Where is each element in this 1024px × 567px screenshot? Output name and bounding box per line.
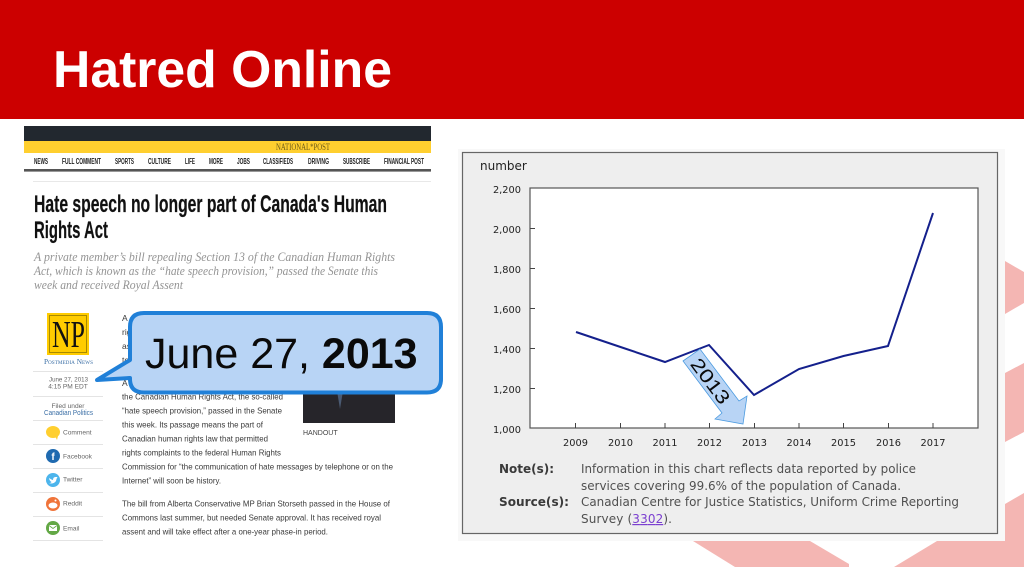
- article body text: to: [122, 355, 129, 365]
- x axis labels: 2016: [876, 438, 901, 449]
- x axis labels: 2013: [742, 438, 767, 449]
- x axis labels: 2014: [787, 438, 811, 449]
- x axis labels: 2010: [608, 438, 633, 449]
- article body text: rig: [122, 327, 132, 337]
- navigation bar: LIFE: [185, 157, 195, 166]
- y axis labels: 2,200: [493, 185, 521, 196]
- article body text: Commons last summer, but needed Senate approval. It has received royal: [122, 512, 381, 522]
- article sidebar: Filed under: [52, 403, 85, 410]
- article body text: assent and will take effect after a one-year phase-in period.: [122, 526, 328, 536]
- article body text: as: [122, 341, 131, 351]
- navigation bar: MORE: [209, 157, 223, 166]
- icon: Facebook: f: [51, 452, 55, 463]
- logo: NP Postmedia News: Postmedia News: [44, 358, 93, 366]
- y axis labels: 1,600: [493, 305, 521, 316]
- red header band: [0, 0, 1024, 119]
- x axis labels: 2009: [563, 438, 588, 449]
- panel: chart: [458, 149, 1005, 541]
- article body text: The bill from Alberta Conservative MP Brian Storseth passed in the House of: [122, 498, 391, 508]
- background pink chevrons: [693, 261, 1024, 567]
- navigation bar: CLASSIFIEDS: [263, 157, 293, 166]
- y axis labels: [493, 185, 521, 436]
- logo: NP Postmedia News: NP: [52, 314, 85, 356]
- chart notes and source: Survey (3302).: [581, 512, 672, 526]
- article sidebar: Facebook: [63, 454, 93, 460]
- y axis labels: 1,400: [493, 345, 521, 356]
- callout: June 27, 2013: June 27, 2013: [145, 330, 418, 378]
- x axis labels: [563, 438, 945, 449]
- logo: NP Postmedia News: [44, 313, 93, 366]
- data line: [576, 213, 933, 395]
- callout: June 27, 2013: [97, 313, 441, 392]
- article deck: Act, which is known as the “hate speech provision,” passed the Senate this: [33, 264, 378, 278]
- article sidebar: 4:15 PM EDT: [48, 384, 88, 390]
- article body text: Commission for “the communication of hate messages by telephone or on the: [122, 462, 393, 472]
- y axis labels: 1,000: [493, 425, 521, 436]
- y axis labels: 2,000: [493, 225, 521, 236]
- icon: Twitter: [46, 473, 60, 487]
- article deck: [33, 250, 395, 292]
- article sidebar: Email: [63, 526, 80, 532]
- article body text: “hate speech provision,” passed in the Senate: [122, 406, 282, 416]
- newspaper masthead: NATIONAL*POST: [276, 142, 330, 152]
- chart notes and source: [499, 462, 959, 526]
- article sidebar: Comment: [63, 430, 92, 436]
- chart notes and source: Information in this chart reflects data reported by police: [581, 462, 916, 476]
- chart notes and source: services covering 99.6% of the population of Canada.: [581, 479, 901, 493]
- x axis labels: 2015: [831, 438, 856, 449]
- navigation bar: CULTURE: [148, 157, 171, 166]
- navigation bar: SUBSCRIBE: [343, 157, 370, 166]
- article deck: A private member’s bill repealing Section 13 of the Canadian Human Rights: [33, 250, 395, 264]
- article sidebar: June 27, 2013: [49, 376, 88, 384]
- icon: Email: [46, 521, 60, 535]
- x axis labels: 2017: [921, 438, 945, 449]
- article body text: rights complaints to the federal Human Rights: [122, 448, 281, 458]
- article sidebar: [33, 371, 103, 541]
- navigation bar: NEWS: [34, 157, 48, 166]
- navigation bar: FINANCIAL POST: [384, 157, 424, 166]
- arrow: 2013: 2013: [686, 355, 734, 409]
- icon: Facebook: [46, 449, 60, 463]
- y axis labels: 1,200: [493, 385, 521, 396]
- x axis labels: 2012: [697, 438, 722, 449]
- article body text: Internet” will soon be history.: [122, 476, 221, 486]
- navigation bar: [24, 157, 431, 182]
- navigation bar: JOBS: [237, 157, 250, 166]
- chart notes and source: Note(s):: [499, 462, 554, 476]
- panel: newspaper article: [24, 126, 431, 541]
- icon: comment: [46, 426, 60, 440]
- article headline: Hate speech no longer part of Canada's Human: [34, 191, 387, 218]
- article deck: week and received Royal Assent: [34, 278, 183, 292]
- article body text: this week. Its passage means the part of: [122, 420, 264, 430]
- article body text: Canadian human rights law that permitted: [122, 434, 268, 444]
- article headline: Rights Act: [34, 217, 108, 244]
- line chart: [493, 185, 978, 449]
- chart notes and source: Source(s):: [499, 495, 569, 509]
- newspaper masthead: [24, 126, 431, 153]
- navigation bar: DRIVING: [308, 157, 329, 166]
- navigation bar: FULL COMMENT: [62, 157, 101, 166]
- y axis labels: 1,800: [493, 265, 521, 276]
- x axis labels: 2011: [653, 438, 677, 449]
- arrow: 2013: [683, 349, 747, 424]
- article headline: [34, 191, 387, 244]
- article sidebar: Canadian Politics: [44, 410, 93, 417]
- icon: Reddit: [46, 497, 60, 511]
- article body text: A: [122, 378, 128, 388]
- photo: [303, 385, 395, 423]
- article body text: A: [122, 313, 128, 323]
- title: Hatred Online: [53, 41, 392, 99]
- article sidebar: Twitter: [63, 476, 83, 484]
- y axis title: number: [480, 159, 527, 173]
- photo credit: HANDOUT: [303, 430, 338, 437]
- chart notes and source: Canadian Centre for Justice Statistics, Uniform Crime Reporting: [581, 495, 959, 509]
- article sidebar: Reddit: [63, 500, 82, 508]
- article body text: [122, 313, 393, 536]
- article body text: the Canadian Human Rights Act, the so-called: [122, 392, 283, 402]
- navigation bar: SPORTS: [115, 157, 134, 166]
